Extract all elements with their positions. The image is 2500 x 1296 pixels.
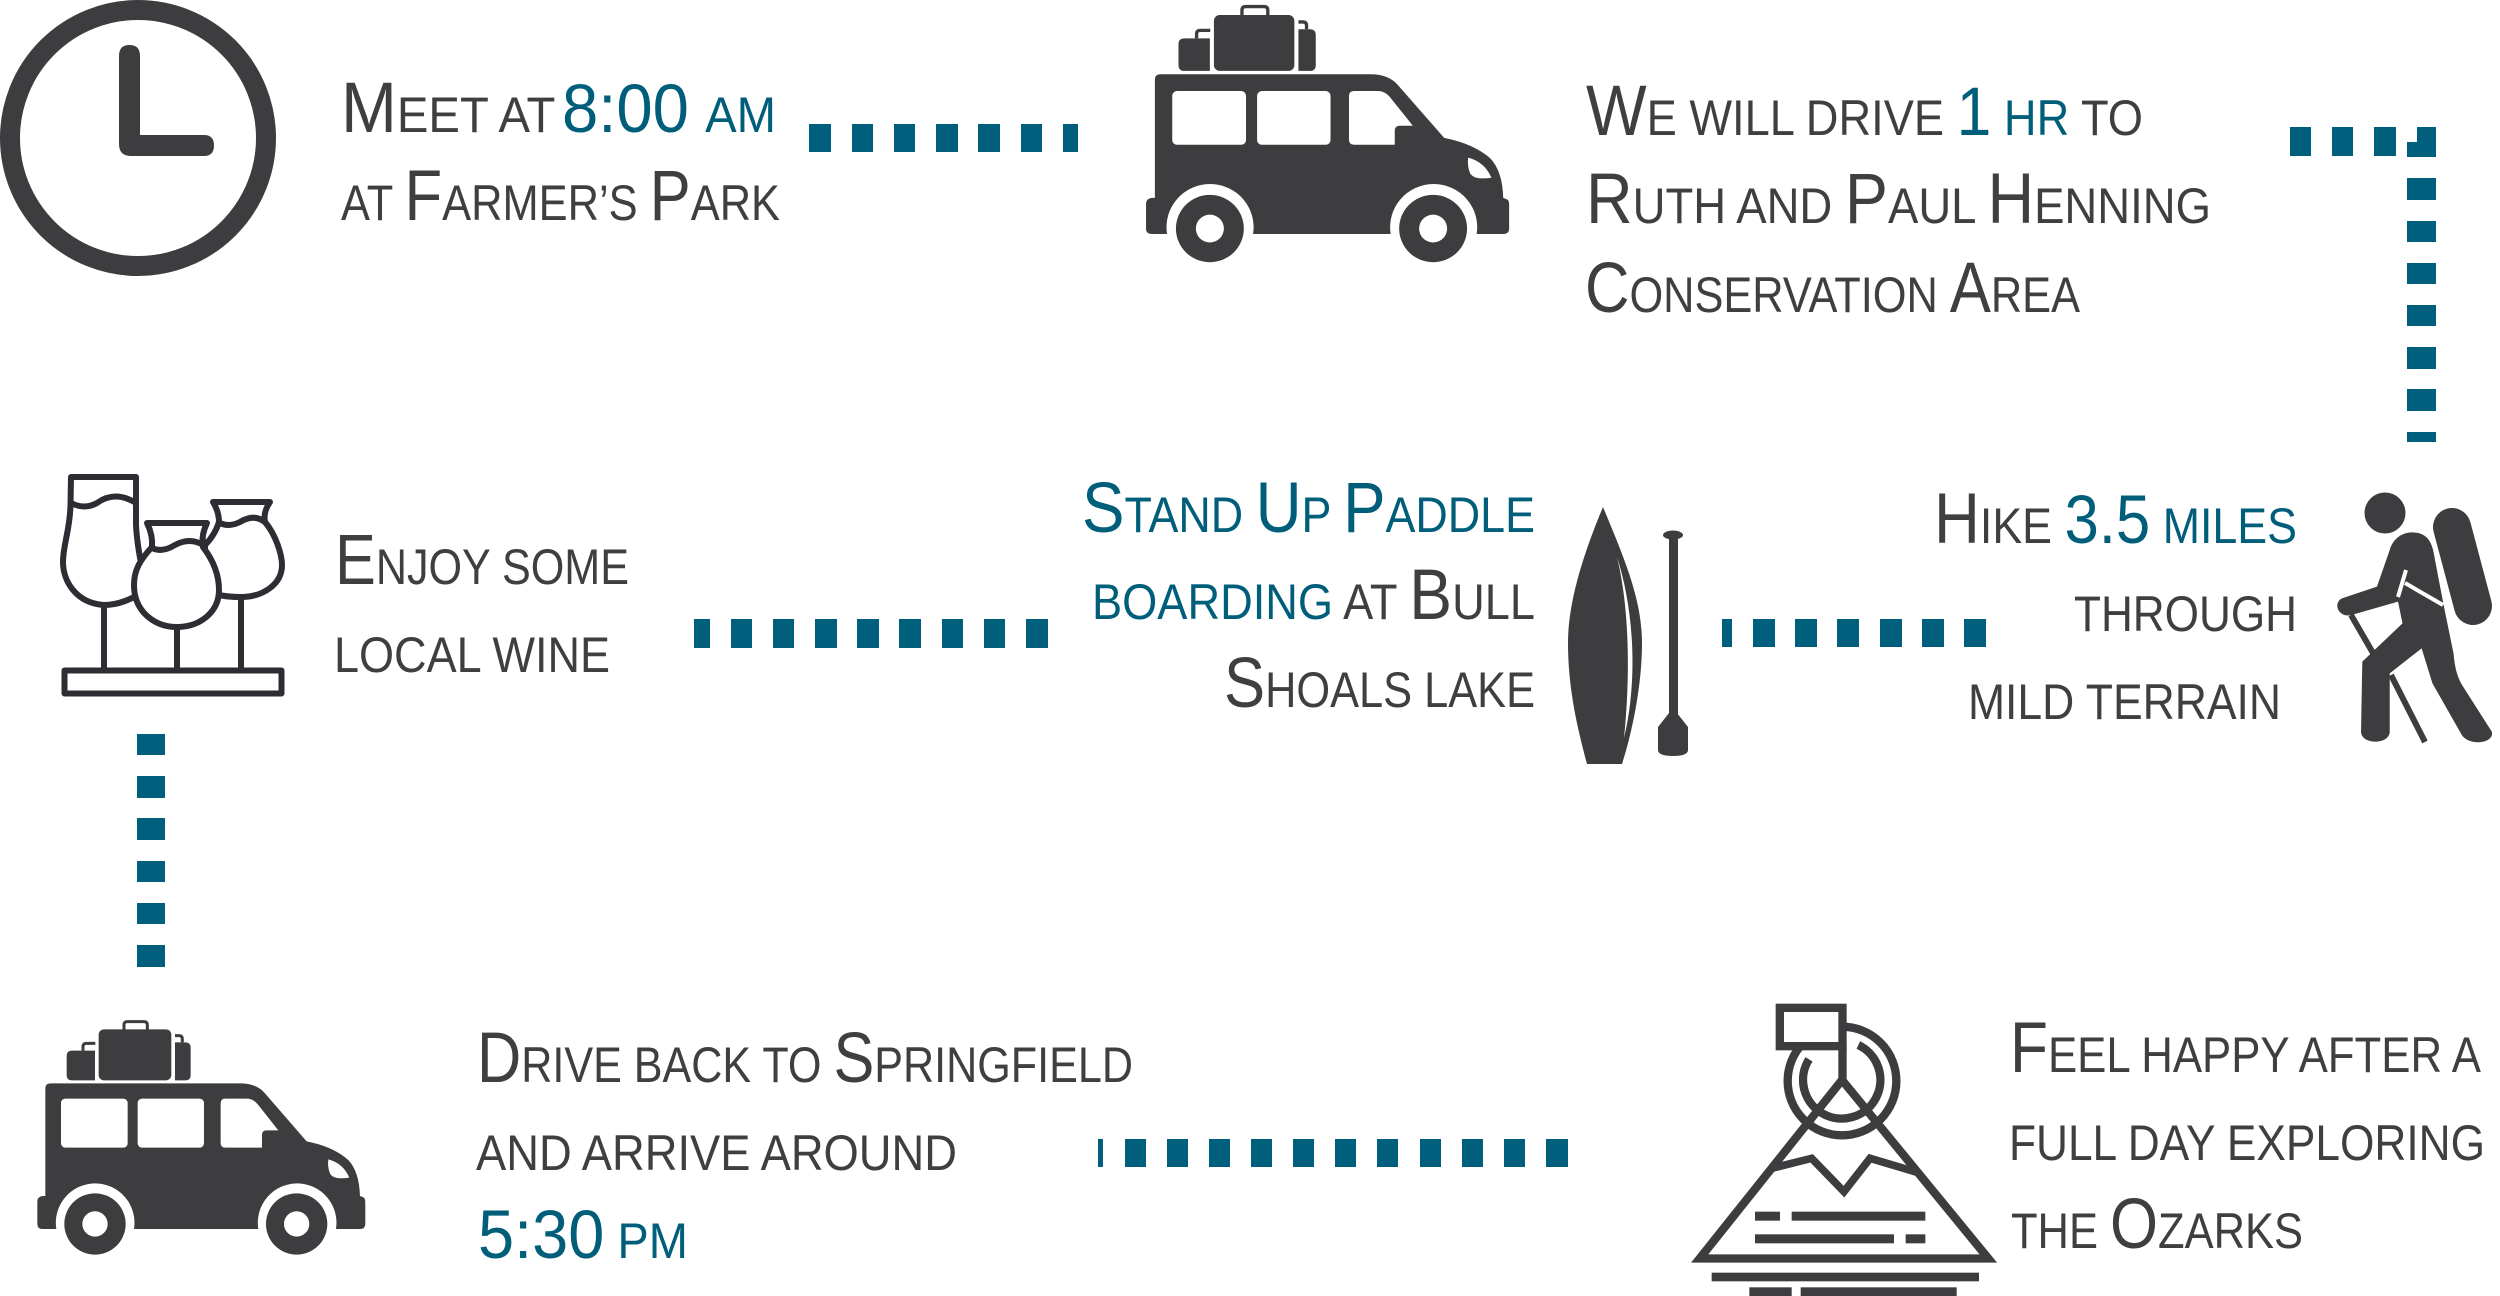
text: stand up paddle boarding at Bull Shoals lake: BOARDING AT BULL (1092, 556, 1535, 635)
text: stand up paddle boarding at Bull Shoals lake (1082, 469, 1535, 723)
icon: van with luggage (return) (37, 1022, 365, 1255)
text: meet at 8:00 am at Farmer's Park: MEET AT 8:00 AM (341, 69, 776, 148)
text: feel happy after a full day exploring the Ozarks: THE OZARKS (2011, 1185, 2303, 1264)
text: enjoy some local wine: ENJOY SOME (335, 521, 629, 600)
text: meet at 8:00 am at Farmer's Park (341, 69, 780, 236)
connector: van to hiker (2290, 127, 2436, 442)
icon: clock (10, 10, 266, 266)
connector: wine to return van (137, 734, 165, 967)
connector: return van to mountain (1098, 1139, 1568, 1167)
text: drive to conservation area: WE WILL DRIVE 1 HR TO (1586, 72, 2143, 151)
text: drive back to Springfield and arrive around 5:30 pm: 5:30 PM (478, 1196, 688, 1273)
connector: clock to van (809, 124, 1078, 152)
icon: paddle board and paddle (1568, 507, 1688, 764)
icon: van with luggage (departure) (1146, 7, 1509, 262)
icon: hiker with backpack (2337, 492, 2492, 742)
text: drive back to Springfield and arrive around 5:30 pm: DRIVE BACK TO SPRINGFIELD (477, 1019, 1133, 1098)
icon: three wine glasses on a tray (63, 477, 282, 694)
connector: hiker to paddle board (1722, 619, 1986, 647)
text: drive back to Springfield and arrive around 5:30 pm (476, 1019, 1133, 1273)
text: meet at 8:00 am at Farmer's Park: AT FARMER’S PARK (341, 157, 780, 236)
text: feel happy after a full day exploring the Ozarks (2009, 1009, 2485, 1264)
text: stand up paddle boarding at Bull Shoals lake: SHOALS LAKE (1224, 644, 1535, 723)
connector: paddle board to wine (694, 619, 1048, 648)
text: hike 3.5 miles through mild terrain: THROUGH (2074, 586, 2297, 642)
text: enjoy some local wine: LOCAL WINE (334, 627, 610, 683)
text: drive to conservation area: CONSERVATION AREA (1585, 249, 2081, 328)
icon: mountain with flag and sun (1700, 1008, 1988, 1296)
text: stand up paddle boarding at Bull Shoals lake: STAND UP PADDLE (1082, 469, 1535, 548)
text: drive back to Springfield and arrive around 5:30 pm: AND ARRIVE AROUND (476, 1125, 957, 1181)
text: hike 3.5 miles through mild terrain: MILD TERRAIN (1968, 674, 2281, 730)
text: hike 3.5 miles through mild terrain (1934, 480, 2297, 730)
text: drive to conservation area (1585, 72, 2211, 328)
text: hike 3.5 miles through mild terrain: HIKE 3.5 MILES (1934, 480, 2297, 559)
text: drive to conservation area: RUTH AND PAUL HENNING (1586, 160, 2211, 239)
text: enjoy some local wine (334, 521, 629, 683)
